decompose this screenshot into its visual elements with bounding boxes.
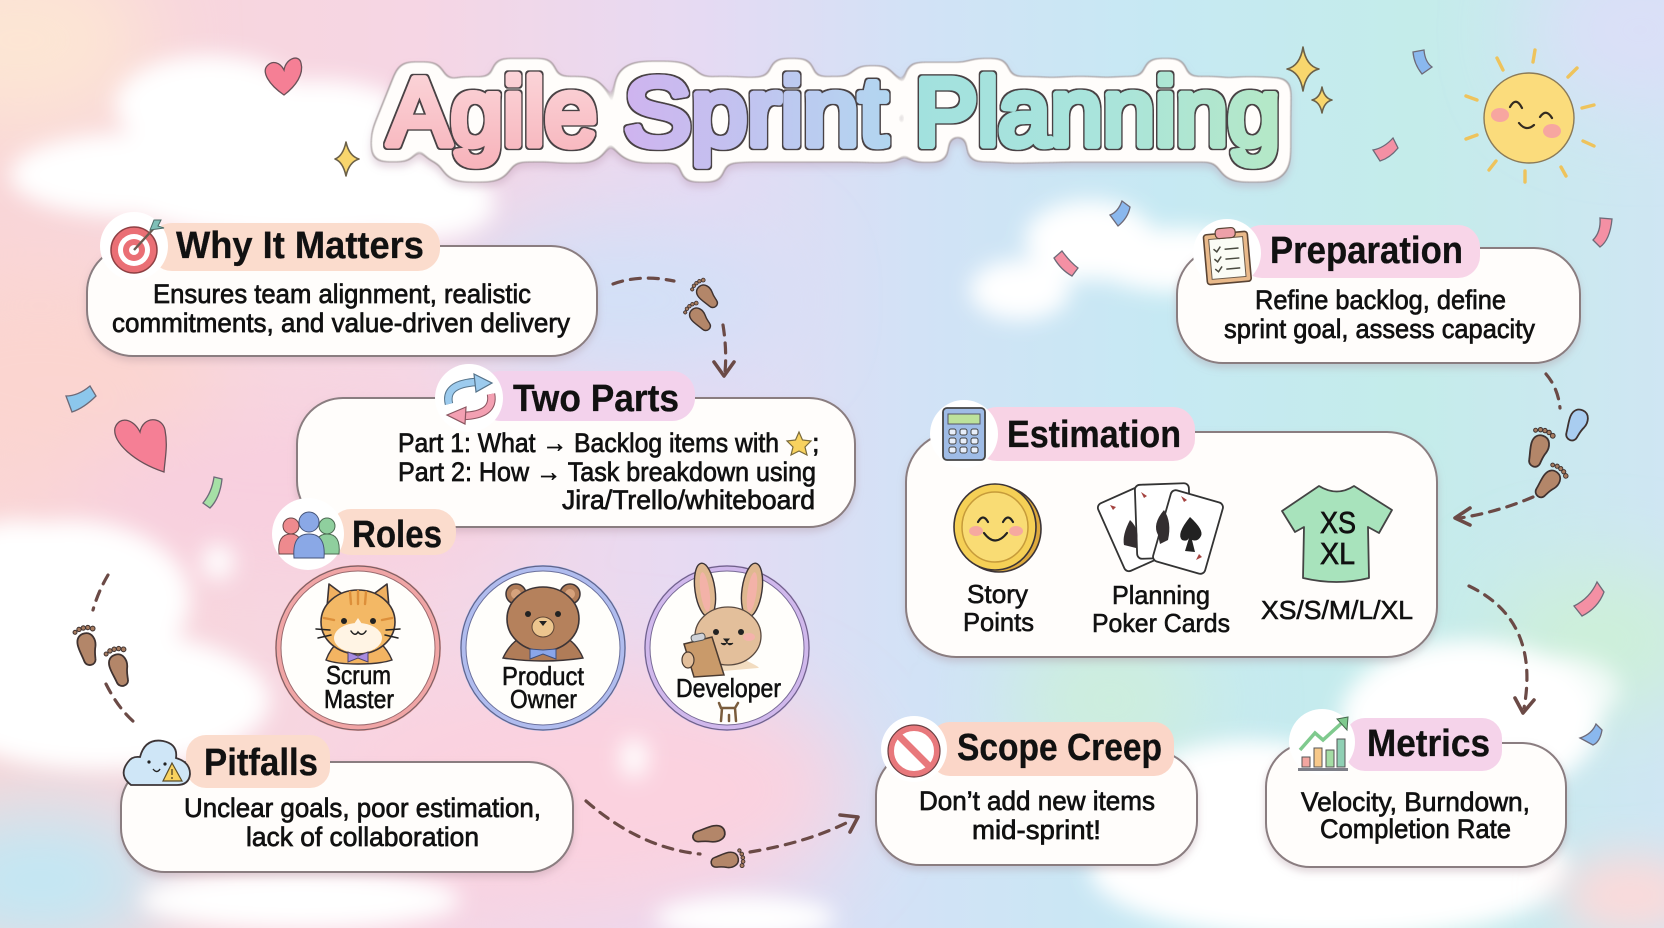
icon: target with arrow bbox=[100, 212, 168, 280]
text: Pitfalls body bbox=[184, 793, 541, 852]
text: Pitfalls body: Unclear goals, poor estimation, bbox=[184, 793, 541, 823]
label: XS/S/M/L/XL: XS/S/M/L/XL bbox=[1261, 595, 1413, 625]
heading pill: Scope Creep bbox=[930, 722, 1174, 776]
icon: green t-shirt bbox=[1282, 486, 1392, 582]
label: XS XL on shirt: XL bbox=[1320, 536, 1355, 571]
text: Two Parts body: Part 2: How → Task breakdown using bbox=[398, 457, 816, 487]
item: Planning Poker Cards bbox=[1092, 483, 1230, 638]
heading pill: Two Parts: Two Parts bbox=[513, 378, 679, 420]
text: Two Parts body: Part 1: What → Backlog items with bbox=[398, 428, 779, 458]
panel: Pitfalls bbox=[121, 735, 573, 872]
text: Metrics body bbox=[1301, 787, 1530, 844]
icon: three people bbox=[272, 498, 344, 570]
heading pill: Preparation bbox=[1240, 225, 1480, 278]
icon: gold star bbox=[787, 432, 811, 455]
decorations: sparkles bbox=[335, 47, 1332, 176]
icon: cloud with warning bbox=[124, 741, 190, 785]
label: Scrum Master: Master bbox=[324, 684, 394, 714]
text: Why It Matters body bbox=[112, 279, 570, 338]
label: Story Points: Points bbox=[963, 607, 1034, 637]
label: Story Points: Story bbox=[967, 579, 1028, 609]
text: Pitfalls body: lack of collaboration bbox=[246, 822, 479, 852]
decorations: hearts bbox=[115, 58, 302, 472]
heading pill: Two Parts bbox=[478, 371, 695, 421]
panel: Two Parts bbox=[297, 364, 855, 527]
label: Planning Poker Cards: Planning bbox=[1112, 580, 1210, 610]
heading pill: Estimation bbox=[975, 407, 1195, 461]
text: Two Parts body: ; bbox=[812, 428, 820, 458]
illustration: bear bbox=[503, 584, 583, 661]
text: Scope Creep body: mid-sprint! bbox=[972, 815, 1101, 845]
label: XS XL on shirt: XS bbox=[1320, 505, 1356, 540]
panel: Estimation bbox=[906, 400, 1437, 657]
text: Preparation body bbox=[1224, 285, 1535, 344]
title: Agile Sprint Planning: Agile bbox=[388, 59, 597, 166]
icon: small deer figure bbox=[719, 703, 738, 721]
label: Developer: Developer bbox=[676, 673, 781, 703]
arrow: Why It Matters to Two Parts bbox=[613, 276, 734, 376]
item: Story Points coin bbox=[954, 484, 1041, 637]
text: Scope Creep body bbox=[919, 786, 1155, 845]
arrow: Pitfalls to Scope Creep bbox=[586, 801, 858, 873]
text: Scope Creep body: Don’t add new items bbox=[919, 786, 1155, 816]
illustration: cat bbox=[316, 584, 400, 664]
panel: Preparation bbox=[1177, 219, 1580, 363]
arrow: Roles to Pitfalls footprints bbox=[72, 575, 135, 722]
label: Product Owner: Product bbox=[502, 661, 585, 691]
heading pill: Pitfalls: Pitfalls bbox=[204, 742, 318, 784]
heading pill: Why It Matters: Why It Matters bbox=[176, 225, 424, 267]
icon: calculator bbox=[930, 400, 998, 468]
icon: growth chart bbox=[1289, 709, 1355, 775]
heading pill: Roles: Roles bbox=[352, 514, 442, 556]
cards: three spades bbox=[1096, 483, 1224, 575]
badge: Product Owner bear bbox=[461, 566, 625, 730]
label: Story Points bbox=[963, 579, 1034, 637]
item: T-shirt sizes bbox=[1261, 486, 1413, 625]
heading pill: Metrics bbox=[1345, 718, 1502, 771]
panel: Metrics bbox=[1266, 709, 1566, 867]
heading pill: Preparation: Preparation bbox=[1270, 230, 1463, 272]
arrow: Estimation to Metrics bbox=[1469, 586, 1534, 713]
illustration: rabbit with clipboard bbox=[682, 562, 766, 677]
icon: smiling sun bbox=[1466, 50, 1594, 182]
badge: Scrum Master cat bbox=[276, 566, 440, 730]
label: Scrum Master: Scrum bbox=[326, 660, 391, 690]
text: Preparation body: sprint goal, assess capacity bbox=[1224, 314, 1535, 344]
heading pill: Pitfalls bbox=[186, 735, 330, 788]
title: Agile Sprint Planning: Planning bbox=[915, 59, 1280, 166]
arrow: Preparation to Estimation bbox=[1455, 374, 1591, 525]
panel: Why It Matters bbox=[87, 212, 597, 356]
text: Two Parts body: Jira/Trello/whiteboard bbox=[562, 485, 815, 515]
label: Planning Poker Cards: Poker Cards bbox=[1092, 608, 1230, 638]
text: Preparation body: Refine backlog, define bbox=[1255, 285, 1506, 315]
text: Two Parts body bbox=[398, 428, 820, 515]
icon: two circular arrows bbox=[435, 364, 503, 432]
panel: Scope Creep bbox=[876, 716, 1197, 865]
label: Product Owner: Owner bbox=[510, 684, 577, 714]
heading pill: Scope Creep: Scope Creep bbox=[957, 727, 1162, 769]
label: XS XL on shirt bbox=[1320, 505, 1356, 571]
decorations: confetti bbox=[66, 50, 1612, 745]
badge: Developer rabbit bbox=[645, 562, 809, 730]
icon: prohibited sign bbox=[881, 716, 947, 782]
icon: clipboard checklist bbox=[1193, 219, 1261, 287]
heading pill: Estimation: Estimation bbox=[1007, 414, 1181, 456]
title: Agile Sprint Planning bbox=[388, 59, 1280, 166]
panel: Roles bbox=[272, 498, 456, 570]
label: Planning Poker Cards bbox=[1092, 580, 1230, 638]
title: Agile Sprint Planning: Sprint bbox=[624, 59, 887, 166]
text: Why It Matters body: Ensures team alignment, realistic bbox=[153, 279, 531, 309]
label: Product Owner bbox=[502, 661, 585, 714]
text: Why It Matters body: commitments, and value-driven delivery bbox=[112, 308, 570, 338]
label: Scrum Master bbox=[324, 660, 394, 714]
text: Metrics body: Velocity, Burndown, bbox=[1301, 787, 1530, 817]
heading pill: Metrics: Metrics bbox=[1367, 723, 1490, 765]
text: Metrics body: Completion Rate bbox=[1320, 814, 1511, 844]
